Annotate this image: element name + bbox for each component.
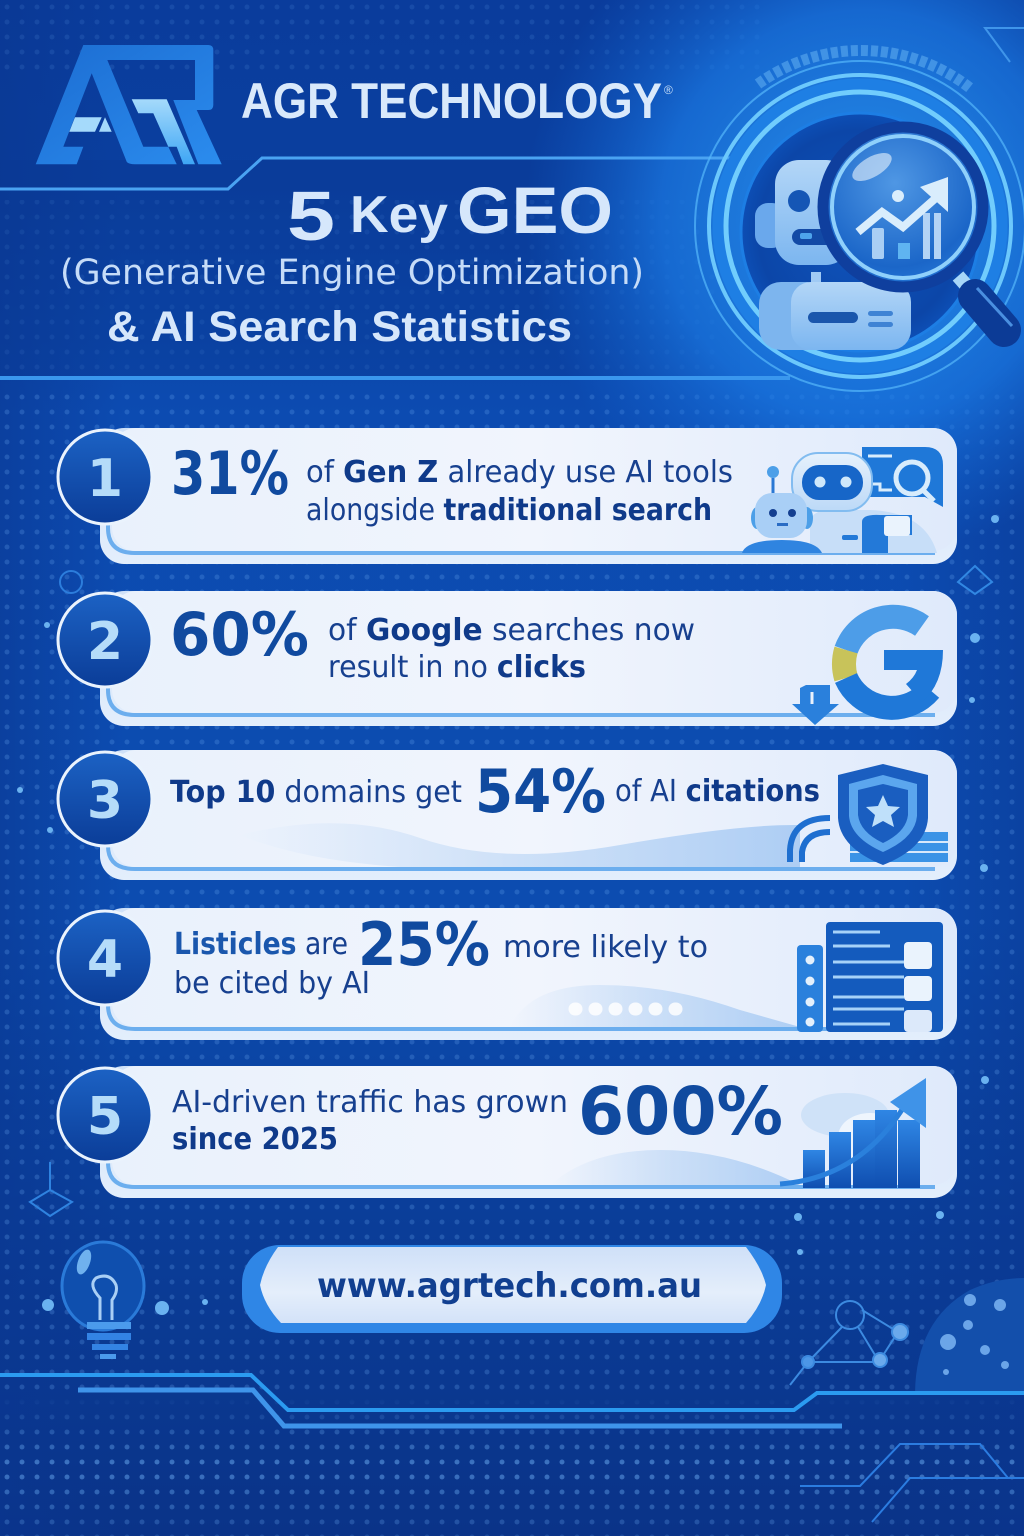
stat 4 panel: [58, 908, 957, 1040]
title line 2: (Generative Engine Optimization): [60, 253, 644, 293]
badge: [58, 1068, 152, 1162]
title: [60, 173, 644, 351]
icon: data globe: [915, 1278, 1024, 1393]
badge: [58, 752, 152, 846]
badge: [58, 911, 152, 1005]
brand name: AGR TECHNOLOGY: [241, 73, 662, 129]
badge: 4: [87, 930, 123, 990]
stat text: [306, 455, 733, 528]
stat text: [174, 927, 708, 1001]
icon: Google G with down arrow: [792, 617, 943, 725]
registered mark: ®: [664, 83, 673, 97]
badge: 1: [87, 449, 123, 509]
stat value: 600%: [578, 1073, 783, 1150]
stat value: 60%: [170, 600, 309, 670]
glowing rings: [695, 50, 1024, 391]
card: [100, 908, 957, 1040]
stat 3 panel: [58, 750, 957, 880]
title line 1: [287, 173, 613, 255]
stat 2 panel: [58, 591, 957, 726]
title line 1: Key: [350, 186, 448, 244]
AGR logo: [36, 45, 222, 164]
badge: [58, 430, 152, 524]
stat text: alongside traditional search: [306, 493, 712, 528]
lens chart: [858, 177, 948, 259]
icon: list document: [797, 922, 943, 1032]
icon: light bulb: [62, 1242, 144, 1359]
website button: [242, 1245, 782, 1333]
footer circuit lines: [0, 1375, 1024, 1522]
card: [100, 1066, 957, 1198]
hero: robot and magnifying glass: [695, 50, 1024, 391]
robot: [755, 160, 911, 350]
icon: growth bars with arrow: [780, 1078, 926, 1188]
stat text: more likely to: [503, 930, 708, 965]
icon: shield with star: [790, 764, 948, 865]
magnifying glass handle: [958, 276, 1012, 330]
glowing particles: [17, 515, 999, 1315]
stat 1 panel: [58, 428, 957, 564]
stat value: 25%: [358, 910, 490, 980]
stat text: Top 10 domains get: [170, 775, 462, 810]
magnifying lens: [823, 127, 983, 287]
stat text: of AI citations: [615, 774, 820, 809]
card: [100, 428, 957, 564]
title line 1: GEO: [457, 173, 613, 247]
stat text: since 2025: [172, 1122, 338, 1157]
stat text: Listicles are: [174, 927, 348, 962]
icon: robots with search bubble: [742, 447, 943, 553]
stat text: result in no clicks: [328, 650, 586, 685]
card: [100, 750, 957, 880]
icon: diamond network left: [30, 1162, 72, 1216]
stat text: [172, 1085, 568, 1157]
title line 3: & AI Search Statistics: [107, 303, 572, 351]
icon: diamond network right: [958, 566, 992, 594]
stat text: [328, 613, 695, 685]
stat text: of Google searches now: [328, 613, 695, 648]
card: [100, 591, 957, 726]
stat text: AI-driven traffic has grown: [172, 1085, 568, 1120]
badge: 5: [87, 1087, 123, 1147]
title line 1: 5: [287, 177, 335, 255]
icon: network graph: [790, 1301, 908, 1385]
badge: 2: [87, 612, 123, 672]
stat value: 54%: [475, 757, 606, 827]
stat text: of Gen Z already use AI tools: [306, 455, 733, 490]
stat 5 panel: [58, 1066, 957, 1198]
website url: www.agrtech.com.au: [317, 1266, 702, 1306]
stat value: 31%: [171, 439, 289, 509]
badge: [58, 593, 152, 687]
icon: ring left: [60, 571, 82, 593]
stat text: be cited by AI: [174, 966, 370, 1001]
header circuit lines: [0, 28, 1024, 378]
stat text: [170, 774, 820, 810]
badge: 3: [87, 771, 123, 831]
